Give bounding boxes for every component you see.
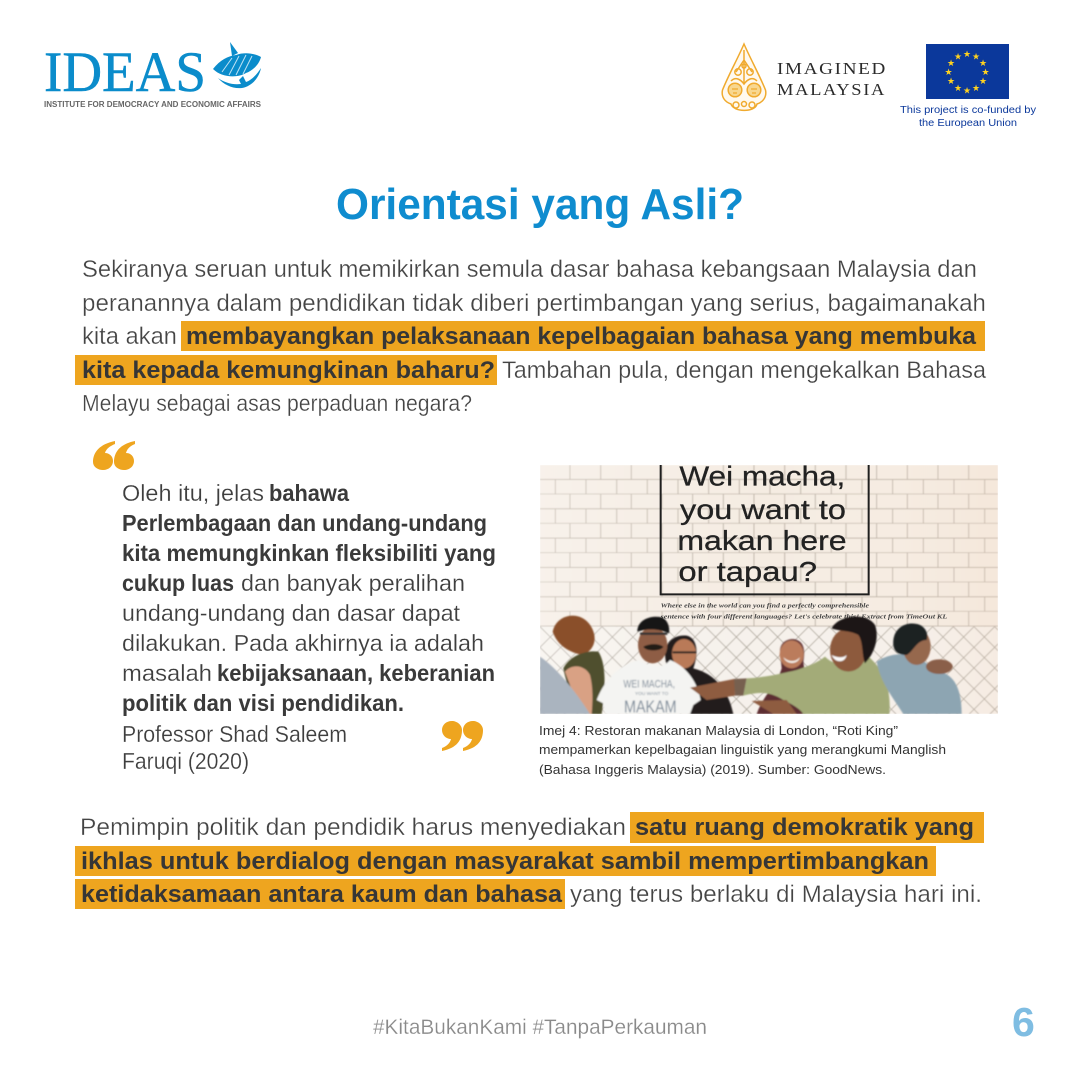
icon: EU flag: ★ [963, 86, 971, 96]
logo: IDEAS: IDEAS [44, 41, 206, 104]
man with cap and white t-shirt: YOU WANT TO [635, 691, 668, 697]
caption: Imej 4: Restoran makanan Malaysia di London, “Roti King” [539, 723, 898, 738]
text block: closing paragraph: yang terus berlaku di Malaysia hari ini. [570, 881, 982, 908]
sign frame and lettering: Where else in the world can you find a perfectly comprehensible [661, 603, 869, 610]
panel: quotation: Faruqi (2020) [122, 748, 249, 774]
panel: quotation: Professor Shad Saleem [122, 721, 347, 747]
grey figure foreground [540, 657, 590, 714]
page number: 6 [1012, 999, 1035, 1045]
icon: EU flag: ★ [954, 84, 962, 94]
text block: intro paragraph: kita akan [82, 323, 177, 350]
panel: quotation: Perlembagaan dan undang-undang [122, 510, 487, 536]
laughing man pointing in olive jacket [690, 617, 890, 714]
panel: quotation: politik dan visi pendidikan. [122, 690, 404, 716]
icon: EU flag: ★ [963, 50, 971, 60]
logo: European Union flag and credit: This project is co-funded by [900, 105, 1036, 116]
icon: EU flag: ★ [947, 77, 955, 87]
panel: quotation: dilakukan. Pada akhirnya ia adalah [122, 630, 484, 656]
text block: closing paragraph: Pemimpin politik dan pendidik harus menyediakan [80, 814, 626, 841]
logo: IDEAS: INSTITUTE FOR DEMOCRACY AND ECONOMIC AFFAIRS [44, 100, 262, 109]
icon: EU flag [926, 44, 1009, 99]
panel: quotation: kita memungkinkan fleksibiliti yang [122, 540, 496, 566]
sign frame and lettering: Wei macha, [679, 461, 845, 492]
logo: European Union flag and credit: the European Union [919, 118, 1017, 129]
man with cap and white t-shirt [597, 617, 701, 716]
sign frame and lettering: you want to [680, 494, 846, 525]
icon: EU flag: ★ [981, 68, 990, 78]
icon: EU flag: ★ [972, 84, 980, 94]
icon: EU flag: ★ [954, 52, 962, 62]
text block: intro paragraph: peranannya dalam pendidikan tidak diberi pertimbangan yang serius, bagaimanakah [82, 290, 986, 317]
text block: intro paragraph: Melayu sebagai asas perpaduan negara? [82, 390, 472, 416]
icon: closing quotation mark [442, 721, 483, 751]
logo: Imagined Malaysia: MALAYSIA [777, 80, 886, 99]
text block: closing paragraph: ikhlas untuk berdialog dengan masyarakat sambil mempertimbangkan [81, 848, 929, 875]
sign frame and lettering: sentence with four different languages? Let's celebrate this! Extract from TimeOut KL [659, 613, 947, 620]
text block: intro paragraph: Sekiranya seruan untuk memikirkan semula dasar bahasa kebangsaan Malaysia dan [82, 256, 977, 283]
icon: gold wayang shape [722, 44, 766, 110]
text block: closing paragraph [75, 812, 984, 909]
icon: EU flag: ★ [947, 59, 955, 69]
icon: EU flag: ★ [944, 68, 953, 78]
text block: closing paragraph: satu ruang demokratik yang [635, 814, 974, 841]
sign frame and lettering: makan here [677, 525, 847, 556]
title: Orientasi yang Asli? [336, 180, 744, 229]
caption: mempamerkan kepelbagaian linguistik yang merangkumi Manglish [539, 742, 946, 757]
man on the right in blue hoodie [877, 624, 962, 714]
man with cap and white t-shirt: MAKAM [624, 696, 677, 716]
text block: closing paragraph: ketidaksamaan antara kaum dan bahasa [81, 881, 563, 908]
icon: EU flag: ★ [972, 52, 980, 62]
logo: Imagined Malaysia [722, 44, 887, 110]
caption [539, 723, 946, 777]
panel: quotation: undang-undang dan dasar dapat [122, 600, 461, 626]
text block: intro paragraph [75, 256, 986, 416]
panel: quotation: kebijaksanaan, keberanian [217, 660, 495, 686]
text block: intro paragraph: membayangkan pelaksanaan kepelbagaian bahasa yang membuka [186, 323, 977, 350]
icon: EU flag: ★ [979, 59, 987, 69]
icon: IDEAS bird [213, 42, 261, 88]
woman on the left [553, 616, 605, 714]
icon: opening quotation mark [93, 441, 135, 470]
panel: quotation: Oleh itu, jelas [122, 480, 264, 506]
text block: intro paragraph: kita kepada kemungkinan baharu? [82, 357, 495, 384]
sign frame and lettering: or tapau? [678, 556, 817, 587]
footer hashtags: #KitaBukanKami #TanpaPerkauman [373, 1016, 707, 1039]
woman with glasses [665, 635, 733, 714]
panel: quotation: masalah [122, 660, 212, 686]
text block: intro paragraph: Tambahan pula, dengan mengekalkan Bahasa [502, 357, 986, 384]
man with cap and white t-shirt: WEI MACHA, [623, 678, 675, 690]
panel: quotation: dan banyak peralihan [241, 570, 465, 596]
logo: European Union flag and credit [900, 44, 1036, 129]
icon: EU flag: ★ [979, 77, 987, 87]
panel: quotation: cukup luas [122, 570, 234, 596]
woman at centre [757, 639, 810, 714]
logo: Imagined Malaysia: IMAGINED [777, 59, 887, 78]
sign frame and lettering [659, 461, 947, 620]
panel: quotation: bahawa [269, 480, 349, 506]
panel: quotation [93, 441, 496, 774]
people [540, 616, 962, 716]
caption: (Bahasa Inggeris Malaysia) (2019). Sumber: GoodNews. [539, 762, 886, 777]
photo: Roti King restaurant wall [540, 461, 998, 716]
